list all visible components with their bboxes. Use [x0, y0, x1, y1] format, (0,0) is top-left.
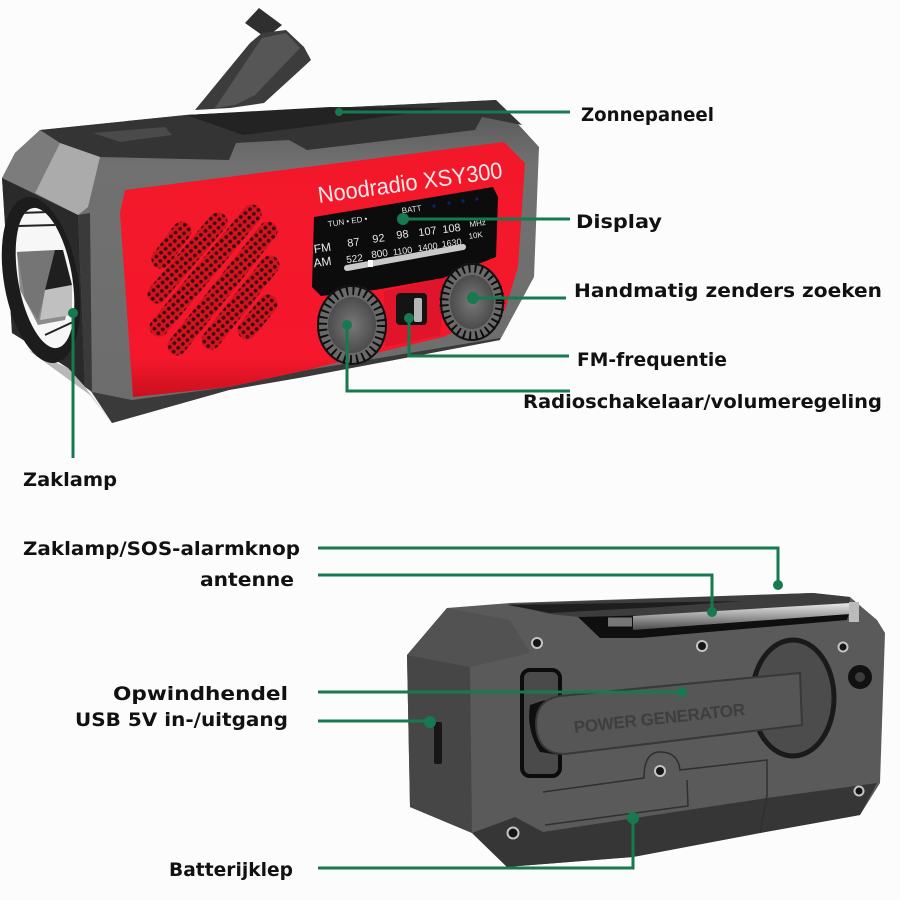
screws	[508, 638, 864, 838]
switch	[384, 278, 445, 347]
display panel: MHz	[469, 218, 486, 229]
top surface	[508, 593, 850, 617]
left volume knob	[317, 285, 387, 365]
red front panel	[120, 142, 525, 397]
display panel: 98	[396, 228, 409, 242]
crank hub	[752, 640, 834, 756]
callout: antenne	[200, 569, 717, 617]
battery cover	[543, 752, 767, 833]
crank shadow	[529, 700, 560, 755]
lower body edge	[92, 338, 500, 423]
callout: Opwindhendel	[113, 683, 687, 705]
callout: Batterijklep: Batterijklep	[169, 859, 293, 881]
callout: Zaklamp: Zaklamp	[23, 469, 117, 491]
display panel: 107	[418, 225, 438, 239]
crank recess	[522, 670, 560, 776]
left end panel	[407, 655, 472, 833]
radio body	[2, 100, 539, 423]
callout: FM-frequentie	[404, 313, 727, 371]
display panel: 1100	[392, 245, 413, 257]
callout: Display	[397, 211, 663, 233]
display panel: 10K	[468, 230, 484, 241]
carry loop	[440, 612, 472, 654]
product photo: front of radio	[0, 8, 539, 423]
rear body	[407, 593, 885, 867]
model name: Noodradio XSY300	[316, 157, 504, 208]
callout: Radioschakelaar/volumeregeling	[342, 320, 882, 413]
jack	[848, 665, 872, 689]
top surface	[40, 100, 522, 160]
chamfer corner	[407, 608, 530, 667]
callout: USB 5V in-/uitgang	[75, 709, 436, 731]
display panel: 1400	[417, 241, 438, 253]
callout: Zaklamp/SOS-alarmknop	[23, 538, 783, 590]
corner piece	[2, 130, 60, 193]
crank handle with label	[536, 673, 802, 754]
side port	[434, 722, 442, 764]
right tuning knob	[440, 263, 504, 341]
solar panel	[186, 107, 443, 135]
callout: Handmatig zenders zoeken	[467, 280, 882, 304]
display panel: 92	[372, 232, 385, 246]
display panel: 108	[442, 222, 462, 236]
dark lamp housing	[2, 178, 85, 387]
callout: Zonnepaneel	[335, 104, 714, 126]
crank handle with label: POWER GENERATOR	[573, 700, 746, 737]
display panel: 800	[371, 248, 389, 261]
display panel: TUN • ED •	[327, 214, 368, 229]
top button	[93, 127, 172, 142]
display panel	[312, 187, 498, 296]
callout: Zaklamp	[23, 308, 117, 491]
display panel: BATT	[401, 204, 422, 215]
callout: antenne: antenne	[200, 569, 294, 591]
light corner piece	[35, 143, 100, 215]
display panel: 522	[346, 253, 364, 266]
callout: Handmatig zenders zoeken: Handmatig zenders zoeken	[574, 280, 882, 302]
crank handle	[195, 8, 311, 110]
display panel: FM	[313, 240, 332, 256]
callout: USB 5V in-/uitgang: USB 5V in-/uitgang	[75, 709, 288, 731]
dark strip next to lamp	[78, 213, 92, 392]
callout: Opwindhendel: Opwindhendel	[113, 683, 288, 705]
light lower wedge	[28, 350, 112, 423]
speaker grille	[157, 214, 270, 346]
callout: Radioschakelaar/volumeregeling: Radioschakelaar/volumeregeling	[523, 391, 882, 413]
callout: Display: Display	[576, 211, 663, 233]
callout: Zonnepaneel: Zonnepaneel	[581, 104, 714, 126]
product photo: back of radio	[407, 593, 885, 867]
antenna	[608, 602, 859, 630]
display panel: 87	[347, 236, 360, 250]
callout: Zaklamp/SOS-alarmknop: Zaklamp/SOS-alarmknop	[23, 538, 300, 560]
callout: FM-frequentie: FM-frequentie	[577, 349, 727, 371]
antenna recess	[578, 610, 850, 638]
solar strip	[508, 601, 743, 613]
lower band	[472, 783, 877, 867]
display panel: AM	[313, 254, 332, 270]
display panel: 1630	[441, 237, 462, 249]
flashlight	[2, 197, 80, 363]
callout: Batterijklep	[169, 812, 639, 881]
